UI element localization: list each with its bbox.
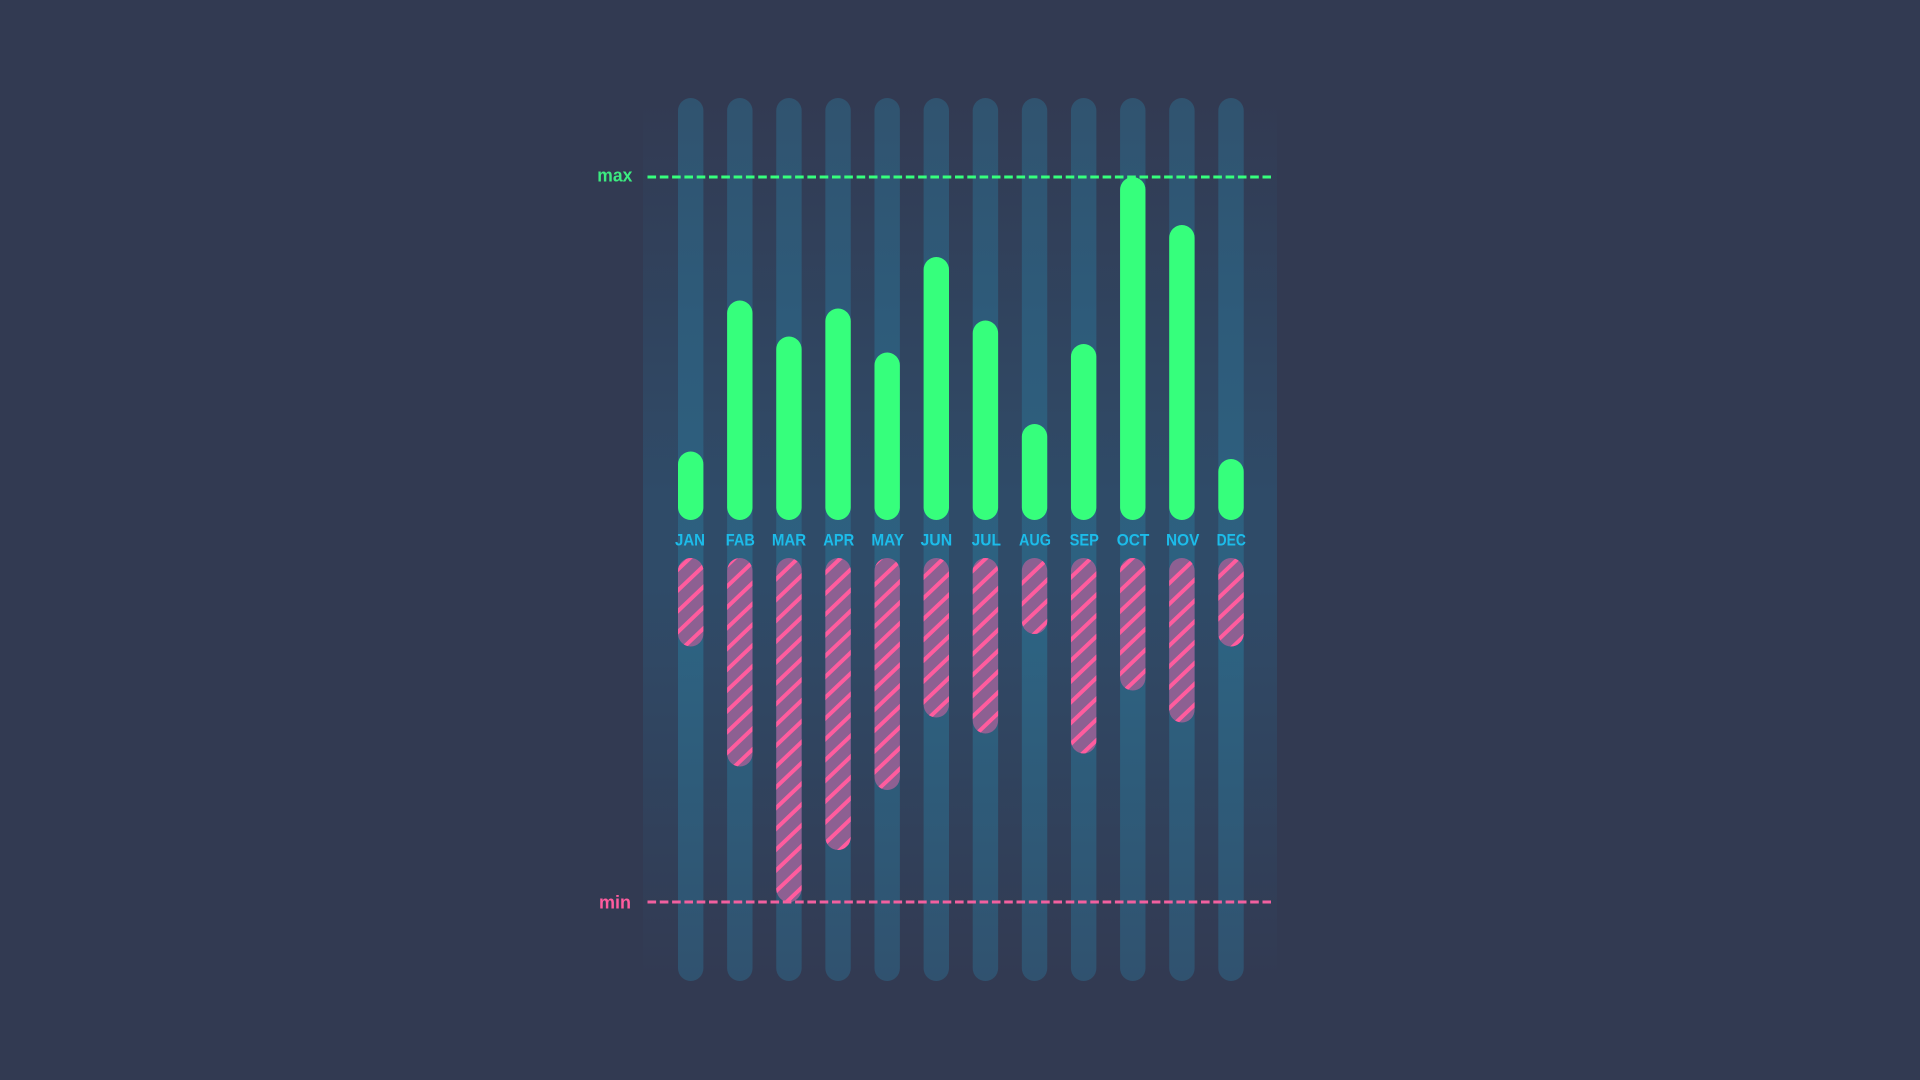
month labels: MAY	[871, 531, 905, 550]
background panel glow	[643, 98, 1277, 981]
month labels: OCT	[1117, 531, 1150, 550]
month labels: NOV	[1166, 531, 1200, 550]
month labels: FAB	[726, 531, 755, 550]
month labels: JAN	[675, 531, 705, 550]
min dashed line	[648, 900, 1271, 904]
month labels: JUN	[920, 531, 952, 550]
max label: max	[597, 166, 632, 186]
pink striped min bars	[678, 558, 1244, 902]
month labels: APR	[823, 531, 854, 550]
max dashed line	[648, 176, 1271, 178]
month labels: SEP	[1070, 531, 1099, 550]
month labels: MAR	[772, 531, 806, 550]
green max bars	[678, 177, 1244, 520]
month tracks	[678, 98, 1244, 981]
min label: min	[599, 892, 631, 912]
month labels: AUG	[1019, 531, 1051, 550]
month labels: JUL	[972, 531, 1001, 550]
month labels	[675, 531, 1246, 550]
month labels: DEC	[1217, 531, 1246, 550]
